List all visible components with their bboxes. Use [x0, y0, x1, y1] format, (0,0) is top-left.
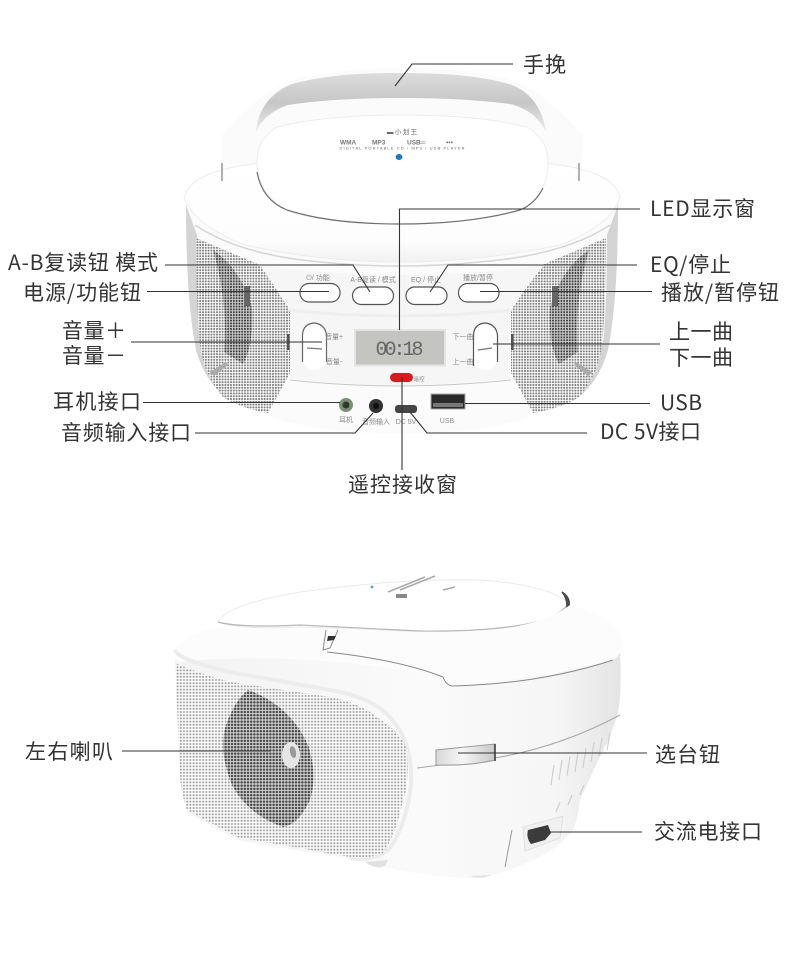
headphone jack: [339, 398, 353, 424]
label: handle: 手挽: [523, 49, 566, 79]
track rocker: 上一曲: [452, 357, 474, 366]
lid: [218, 580, 570, 632]
track rocker: 下一曲: [452, 332, 474, 341]
lid gap shadow: [562, 592, 569, 613]
format logos: USB═: [407, 140, 426, 146]
track rocker: [452, 323, 498, 370]
top shell: [184, 158, 620, 262]
label: power function: 电源/功能钮: [23, 277, 141, 307]
feet: [365, 860, 492, 878]
speaker cone: [223, 690, 314, 827]
lid print: [370, 576, 455, 598]
door seam: [505, 830, 512, 867]
EQ stop button: [406, 275, 447, 304]
label: LED window: LED显示窗: [650, 193, 755, 223]
product: front view of CD player: [184, 68, 620, 434]
label: tuning dial: 选台钮: [655, 739, 720, 769]
shell left top rim shading: [175, 650, 411, 859]
label: volume down: 音量－: [62, 340, 126, 370]
headphone jack: 耳机: [339, 415, 353, 424]
body seam: [417, 715, 620, 768]
format logos: WMA: [340, 140, 357, 146]
leader lines: [122, 64, 660, 832]
label: USB: USB: [660, 387, 702, 417]
control panel divider band: [288, 310, 512, 316]
label: previous track: 上一曲: [669, 316, 733, 346]
top shell: [175, 605, 623, 685]
tuning dial: [436, 744, 495, 765]
LCD display: 00:18: [376, 339, 424, 362]
play pause button: [458, 273, 499, 302]
bluetooth icon: [396, 154, 402, 160]
label: volume up: 音量＋: [62, 315, 126, 345]
label: speakers: 左右喇叭: [25, 736, 113, 766]
label: DC 5V port: DC 5V接口: [600, 416, 701, 446]
carrying handle grey band: [256, 73, 546, 132]
audio input jack: 音频输入: [362, 417, 390, 426]
label: play pause: 播放/暂停钮: [661, 277, 779, 307]
USB port: USB: [440, 418, 455, 425]
format logos: MP3: [372, 140, 386, 146]
label: next track: 下一曲: [669, 342, 733, 372]
power function button: [300, 273, 340, 302]
micro USB DC port: [395, 405, 417, 426]
volume rocker: 音量+: [325, 332, 343, 341]
remote receiver window: [390, 373, 425, 383]
main body: [186, 165, 620, 434]
volume rocker: [302, 323, 343, 370]
product: rear side view of CD player: [170, 576, 623, 878]
speaker centre: [282, 742, 300, 768]
panel lower edge: [290, 380, 511, 386]
label: headphone jack: 耳机接口: [53, 386, 141, 416]
label: AC socket: 交流电接口: [654, 816, 762, 846]
format logos: ▪▪▪: [446, 140, 453, 146]
vent slots: [551, 733, 610, 812]
label: A-B repeat mode: A-B复读钮 模式: [8, 247, 158, 277]
remote receiver window: 遥控: [413, 375, 425, 383]
handle hinge slots: [222, 163, 579, 181]
label: remote receiver: 遥控接收窗: [348, 469, 457, 499]
product description: DIGITAL PORTABLE CD / MP3 / USB PLAYER: [340, 146, 465, 150]
speaker centre slot: [290, 746, 296, 758]
shell rim line: [195, 225, 610, 266]
hinge gap: [327, 636, 336, 641]
carrying handle bracket: [222, 68, 583, 182]
EQ stop button: EQ / 停止: [411, 275, 441, 284]
label: EQ stop: EQ/停止: [650, 249, 731, 279]
speaker grille: [175, 663, 408, 858]
audio input jack: [362, 399, 390, 426]
lower port panel: [268, 380, 533, 424]
USB port: [431, 394, 465, 425]
left side edge shading: [186, 205, 232, 402]
play pause button: 播放/暂停: [463, 273, 493, 282]
lower body: [175, 650, 621, 878]
CD lid: [257, 115, 548, 224]
right side edge shading: [572, 205, 618, 402]
shell seam lines: [323, 630, 613, 686]
volume rocker: 音量-: [326, 357, 343, 366]
left speaker grille: [196, 238, 290, 413]
right speaker grille: [511, 238, 606, 413]
power function button: ⏻/ 功能: [306, 273, 330, 282]
lid lower shadow: [218, 604, 568, 631]
micro USB DC port: DC 5V: [396, 419, 417, 426]
label: audio input: 音频输入接口: [61, 417, 191, 447]
A-B repeat mode button: [350, 275, 396, 304]
brand logo: ▬ 小 划 王: [387, 126, 418, 136]
AC power socket: [523, 816, 563, 851]
LCD display: [355, 330, 445, 366]
control panel: [260, 265, 544, 385]
A-B repeat mode button: A-B复读 / 模式: [350, 275, 396, 284]
